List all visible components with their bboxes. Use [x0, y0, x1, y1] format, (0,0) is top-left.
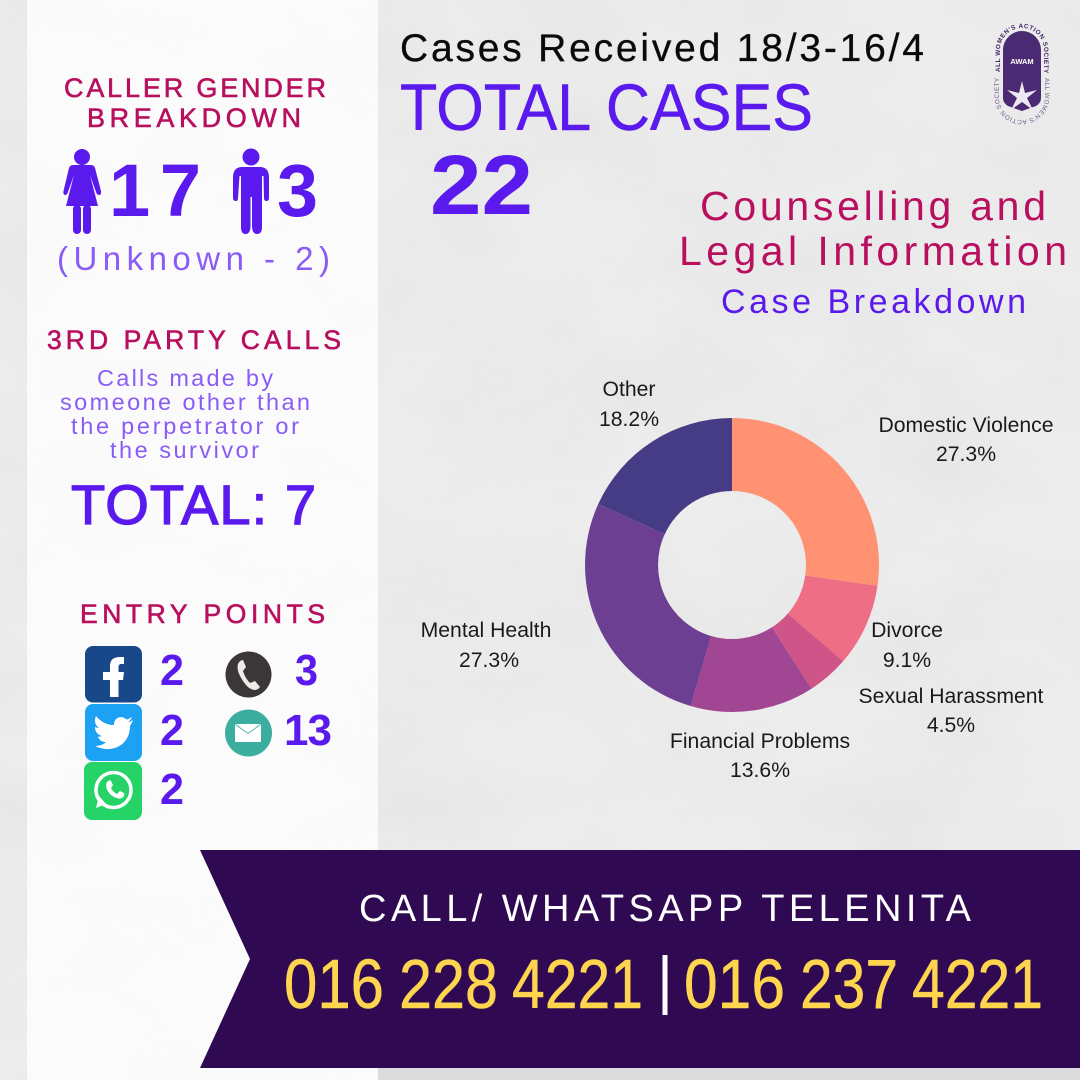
heading: caller gender breakdown: CALLER GENDER: [64, 73, 326, 103]
banner: helpline: [200, 850, 1080, 1068]
chart labels: 9.1%: [883, 649, 931, 672]
number: third party total: TOTAL: 7: [71, 473, 316, 536]
text: unknown count: (Unknown - 2): [57, 240, 330, 277]
text: call whatsapp telenita: CALL/ WHATSAPP TELENITA: [359, 888, 972, 930]
slice: other: [598, 418, 732, 534]
number: whatsapp: 2: [160, 765, 184, 814]
text: third party explanation: Calls made by: [97, 365, 273, 391]
subheading: case breakdown: Case Breakdown: [721, 283, 1026, 321]
text: third party explanation: the survivor: [110, 437, 259, 463]
donut chart: case breakdown: [421, 378, 1054, 782]
slice: sexual harassment: [772, 614, 843, 689]
chart labels: 27.3%: [936, 443, 996, 466]
chart labels: Sexual Harassment: [859, 685, 1044, 708]
chart labels: Domestic Violence: [878, 414, 1054, 437]
chart labels: 27.3%: [459, 649, 519, 672]
chart labels: [421, 378, 1054, 782]
chart labels: 13.6%: [730, 759, 790, 782]
heading: entry points: ENTRY POINTS: [80, 599, 325, 629]
heading: counselling and legal information: Legal Information: [679, 228, 1067, 274]
icon: phone: [226, 652, 272, 698]
panel: third party calls: [47, 325, 341, 536]
icon: AWAM logo: ALL WOMEN'S ACTION SOCIETY: [994, 78, 1050, 124]
slice: financial problems: [691, 627, 812, 712]
number: facebook: 2: [160, 646, 184, 695]
icon: woman: [63, 149, 101, 234]
icon: whatsapp: [84, 762, 142, 820]
number: twitter: 2: [160, 706, 184, 755]
text: third party explanation: someone other than: [60, 389, 310, 415]
icon: AWAM logo: [994, 24, 1050, 124]
chart labels: Other: [602, 378, 656, 401]
panel: entry points: [80, 599, 332, 820]
chart labels: 18.2%: [599, 408, 659, 431]
panel: left sidebar: [27, 0, 378, 1080]
total cases number: 22: [430, 138, 533, 232]
text: phone numbers: 237: [800, 945, 898, 1023]
text: phone numbers: [284, 945, 1043, 1023]
number: email: 13: [284, 706, 332, 755]
heading: caller gender breakdown: BREAKDOWN: [87, 103, 301, 133]
chart labels: Mental Health: [421, 619, 551, 642]
slice: domestic violence: [732, 418, 879, 586]
text: phone numbers: 4221: [912, 945, 1043, 1023]
number: male callers: 3: [277, 149, 318, 232]
heading: counselling and legal information: [679, 183, 1067, 274]
text: phone numbers: 4221: [512, 945, 643, 1023]
heading: counselling and legal information: Counselling and: [700, 183, 1046, 229]
chart labels: Divorce: [871, 619, 943, 642]
panel: caller gender breakdown: [57, 73, 330, 277]
text: phone numbers: 016: [284, 945, 384, 1023]
slice: mental health: [585, 504, 711, 706]
text: third party explanation: the perpetrator or: [71, 413, 299, 439]
icon: man: [233, 148, 269, 234]
text: phone numbers: 016: [684, 945, 785, 1023]
number: phone: 3: [295, 646, 318, 695]
heading: caller gender breakdown: [64, 73, 326, 133]
icon: facebook: [85, 646, 142, 702]
icon: twitter: [85, 704, 142, 761]
icon: email: [225, 710, 272, 756]
chart labels: Financial Problems: [670, 730, 850, 753]
icon: AWAM logo: AWAM: [1010, 57, 1034, 66]
heading: cases received date range: Cases Received 18/3-16/4: [400, 27, 924, 70]
number: female callers: 17: [109, 149, 201, 232]
icon: AWAM logo: ALL WOMEN'S ACTION SOCIETY: [996, 24, 1048, 74]
text: third party explanation: [60, 365, 310, 463]
heading: 3rd party calls: 3RD PARTY CALLS: [47, 325, 341, 355]
heading: total cases: TOTAL CASES: [400, 70, 813, 144]
slice: divorce: [788, 576, 878, 661]
chart labels: 4.5%: [927, 714, 975, 737]
text: phone numbers: 228: [399, 945, 498, 1023]
